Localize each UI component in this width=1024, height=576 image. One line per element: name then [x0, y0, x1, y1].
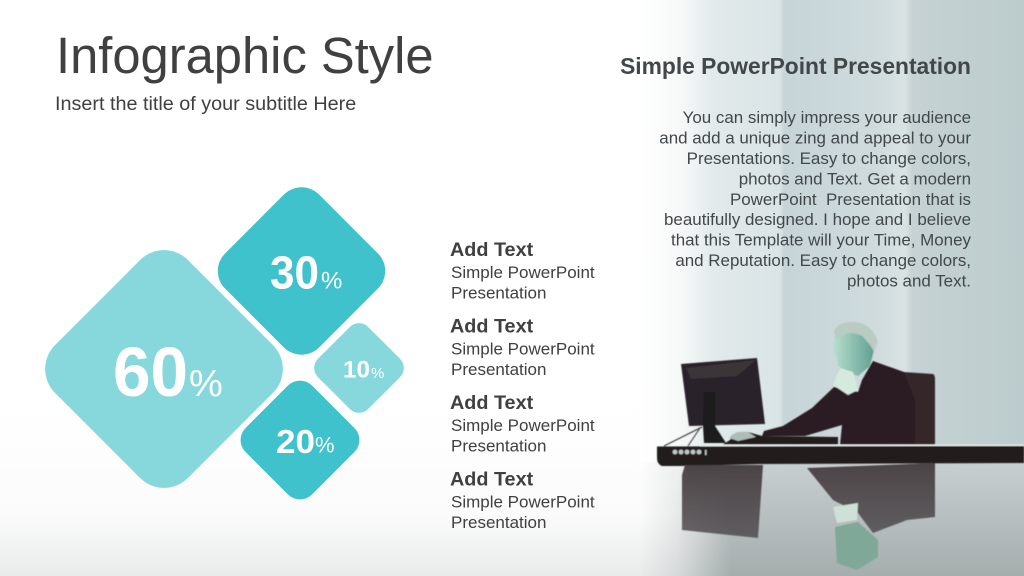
- icon: chair back: [903, 372, 935, 445]
- body text: beautifully designed. I hope and I believe: [664, 210, 971, 229]
- body text: that this Template will your Time, Money: [671, 230, 972, 250]
- item 4: [450, 468, 595, 532]
- item 1: Simple PowerPoint: [451, 263, 595, 282]
- diamond: 60%: [31, 236, 297, 502]
- desk top: [700, 444, 1024, 446]
- item 1: Presentation: [451, 284, 546, 302]
- item 2: Add Text: [450, 316, 534, 338]
- diamond: 30%: %: [321, 268, 342, 294]
- list: add text items: [450, 239, 595, 532]
- item 4: Add Text: [450, 468, 534, 490]
- icon: monitor: [681, 358, 765, 426]
- diamond: 60%: %: [189, 363, 223, 405]
- subtitle: Insert the title of your subtitle Here: [55, 93, 356, 115]
- diamond: 20%: %: [315, 432, 335, 458]
- diamond: 30%: 30: [270, 246, 319, 298]
- diamond: 60%: 60: [113, 333, 188, 411]
- diamond: 10%: %: [371, 365, 384, 382]
- body text: and Reputation. Easy to change colors,: [675, 251, 971, 270]
- icon: man's hair: [834, 322, 878, 352]
- diamond: 10%: [309, 318, 409, 418]
- item 2: [450, 316, 595, 379]
- photo: man at desk with monitor: [657, 322, 1024, 570]
- body text: photos and Text. Get a modern: [739, 170, 971, 188]
- heading: Simple PowerPoint Presentation: [620, 53, 971, 79]
- icon: man's torso and arm: [762, 361, 915, 445]
- icon: man's head: [833, 323, 877, 376]
- body text: PowerPoint Presentation that is: [730, 190, 971, 209]
- panel: right description: [620, 53, 972, 290]
- item 3: Add Text: [450, 392, 534, 414]
- body text: and add a unique zing and appeal to your: [659, 128, 971, 148]
- diamond: 20%: [234, 374, 366, 506]
- icon: desk control buttons: [673, 450, 706, 455]
- diamond: 10%: 10: [343, 356, 370, 384]
- item 1: [450, 239, 595, 302]
- body text: Presentations. Easy to change colors,: [687, 149, 971, 168]
- item 4: Presentation: [451, 513, 546, 532]
- item 4: Simple PowerPoint: [451, 492, 595, 512]
- chart: percentage diamonds: [31, 177, 409, 506]
- item 2: Simple PowerPoint: [451, 340, 595, 358]
- diamond: 30%: [207, 177, 396, 365]
- body text: [659, 108, 972, 290]
- body text: You can simply impress your audience: [683, 108, 971, 127]
- item 1: Add Text: [450, 239, 534, 261]
- reflection: man: [807, 463, 935, 533]
- icon: cables: [664, 427, 702, 446]
- item 3: Simple PowerPoint: [451, 416, 595, 435]
- icon: keyboard and hand: [722, 432, 838, 445]
- item 3: Presentation: [451, 436, 546, 456]
- reflection: monitor: [682, 465, 763, 538]
- diamond: 20%: 20: [276, 423, 315, 460]
- icon: man's hand on chin: [833, 368, 858, 395]
- body text: photos and Text.: [847, 272, 971, 290]
- item 2: Presentation: [451, 360, 546, 379]
- title: Infographic Style: [56, 27, 434, 84]
- item 3: [450, 392, 595, 456]
